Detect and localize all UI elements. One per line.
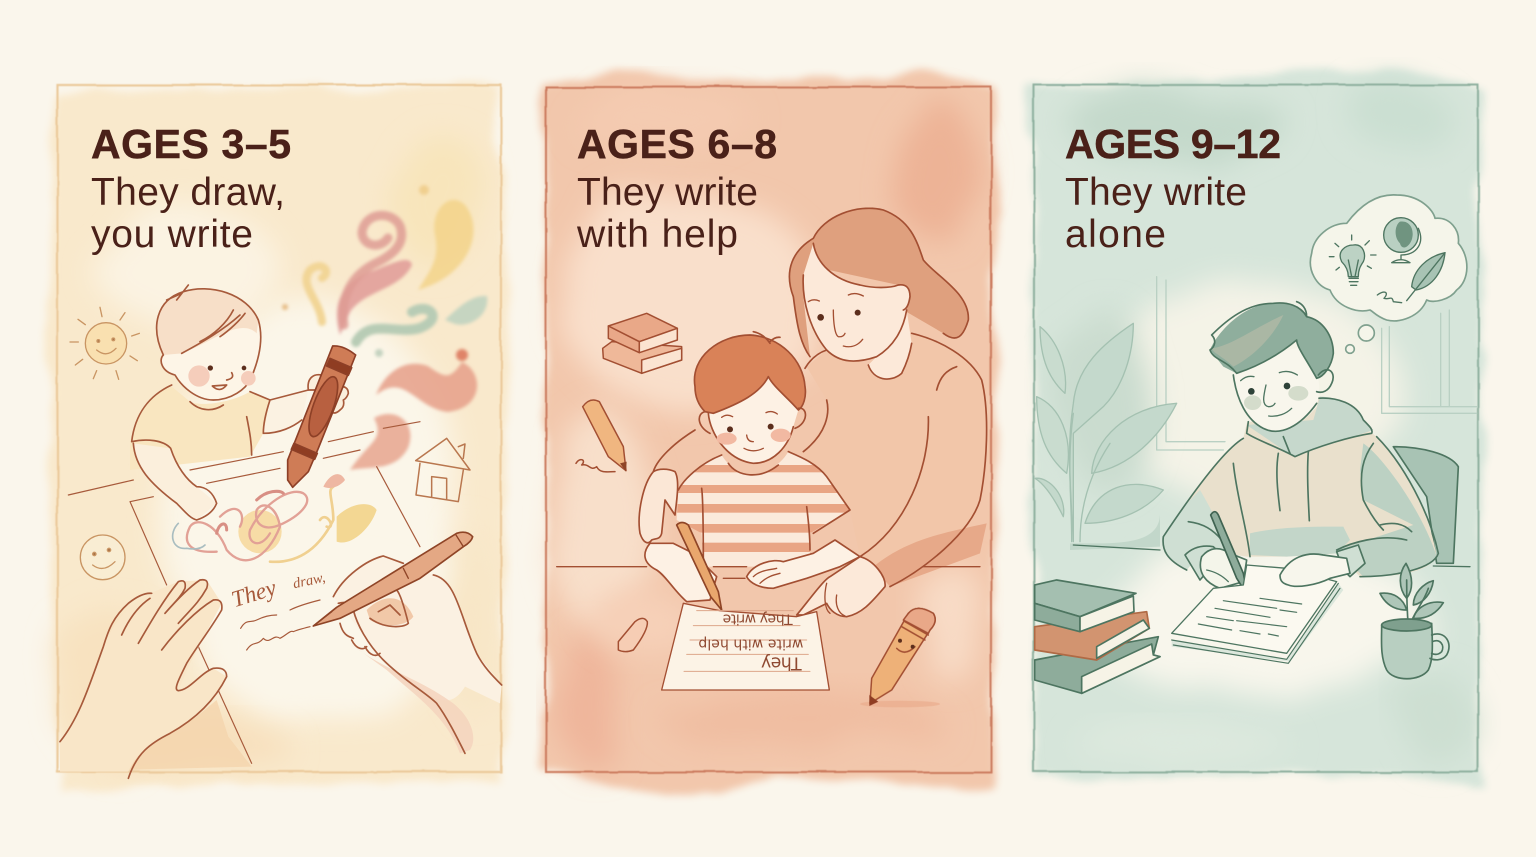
smiley face bbox=[80, 535, 125, 580]
child's pencil bbox=[677, 522, 722, 610]
table bbox=[557, 567, 980, 578]
icon: pencil with squiggle bbox=[576, 400, 627, 472]
illustration: older child writing alone bbox=[1035, 195, 1477, 693]
subheading: they write with help: They write bbox=[577, 171, 758, 214]
stack of books bbox=[1035, 580, 1160, 693]
head bbox=[1210, 302, 1333, 431]
subheading: they write with help: with help bbox=[576, 213, 738, 256]
panel: ages 3-5 bbox=[50, 85, 508, 792]
frame bbox=[1034, 85, 1478, 772]
child bbox=[673, 332, 853, 567]
watercolour wash: yellow bbox=[50, 86, 508, 792]
adult right hand with pen bbox=[313, 532, 502, 753]
panel: ages 9-12 bbox=[1030, 68, 1482, 783]
house bbox=[416, 438, 470, 502]
notebook bbox=[1172, 565, 1343, 663]
thought bubble bbox=[1310, 195, 1467, 353]
left hand on notebook bbox=[1280, 554, 1350, 586]
icon: books bbox=[603, 313, 682, 373]
subheading: they draw, you write: you write bbox=[91, 213, 253, 256]
table and paper bbox=[68, 422, 420, 763]
background plant bbox=[1035, 323, 1177, 550]
writing paper: write with help bbox=[698, 635, 803, 651]
frame bbox=[58, 85, 501, 772]
adult left hand bbox=[60, 580, 252, 778]
scribble bbox=[173, 474, 377, 562]
handwriting bbox=[228, 570, 327, 650]
background window bbox=[1157, 277, 1477, 450]
hands and arms bbox=[639, 469, 885, 617]
illustration: child with crayon and adult hands bbox=[60, 285, 502, 778]
watercolour wash: sage green bbox=[1030, 68, 1482, 783]
panel: ages 6-8 bbox=[542, 68, 996, 790]
paint swirls bbox=[282, 185, 487, 470]
watercolour wash: terracotta bbox=[542, 68, 996, 790]
child bbox=[130, 285, 348, 520]
frame bbox=[546, 87, 991, 772]
writing paper: They write bbox=[723, 611, 794, 627]
heading: ages 9-12: AGES 9–12 bbox=[1065, 121, 1281, 167]
hoodie bbox=[1163, 397, 1438, 580]
writing paper: They bbox=[761, 652, 803, 672]
subheading: they write alone: alone bbox=[1065, 213, 1166, 256]
subheading: they draw, you write: They draw, bbox=[91, 171, 285, 214]
handwriting: draw, bbox=[292, 570, 327, 592]
crayon bbox=[288, 346, 356, 487]
icon: quill bbox=[1377, 253, 1445, 303]
icon: light bulb bbox=[1329, 235, 1376, 285]
icon: eraser bbox=[618, 618, 647, 652]
icon: globe bbox=[1384, 218, 1421, 263]
heading: ages 6-8: AGES 6–8 bbox=[577, 121, 777, 167]
subheading: they write alone: They write bbox=[1065, 171, 1247, 214]
writing paper bbox=[662, 603, 829, 690]
potted plant in mug bbox=[1380, 563, 1449, 679]
illustration: parent helping child bbox=[557, 208, 987, 707]
sun bbox=[70, 307, 139, 379]
parent bbox=[653, 208, 987, 587]
heading: ages 3-5: AGES 3–5 bbox=[91, 121, 291, 167]
handwriting: They bbox=[228, 575, 280, 613]
chair bbox=[1393, 447, 1458, 563]
pencil and hand bbox=[1200, 512, 1247, 595]
desk lines bbox=[1073, 545, 1470, 567]
icon: smiling pencil bbox=[860, 608, 940, 707]
